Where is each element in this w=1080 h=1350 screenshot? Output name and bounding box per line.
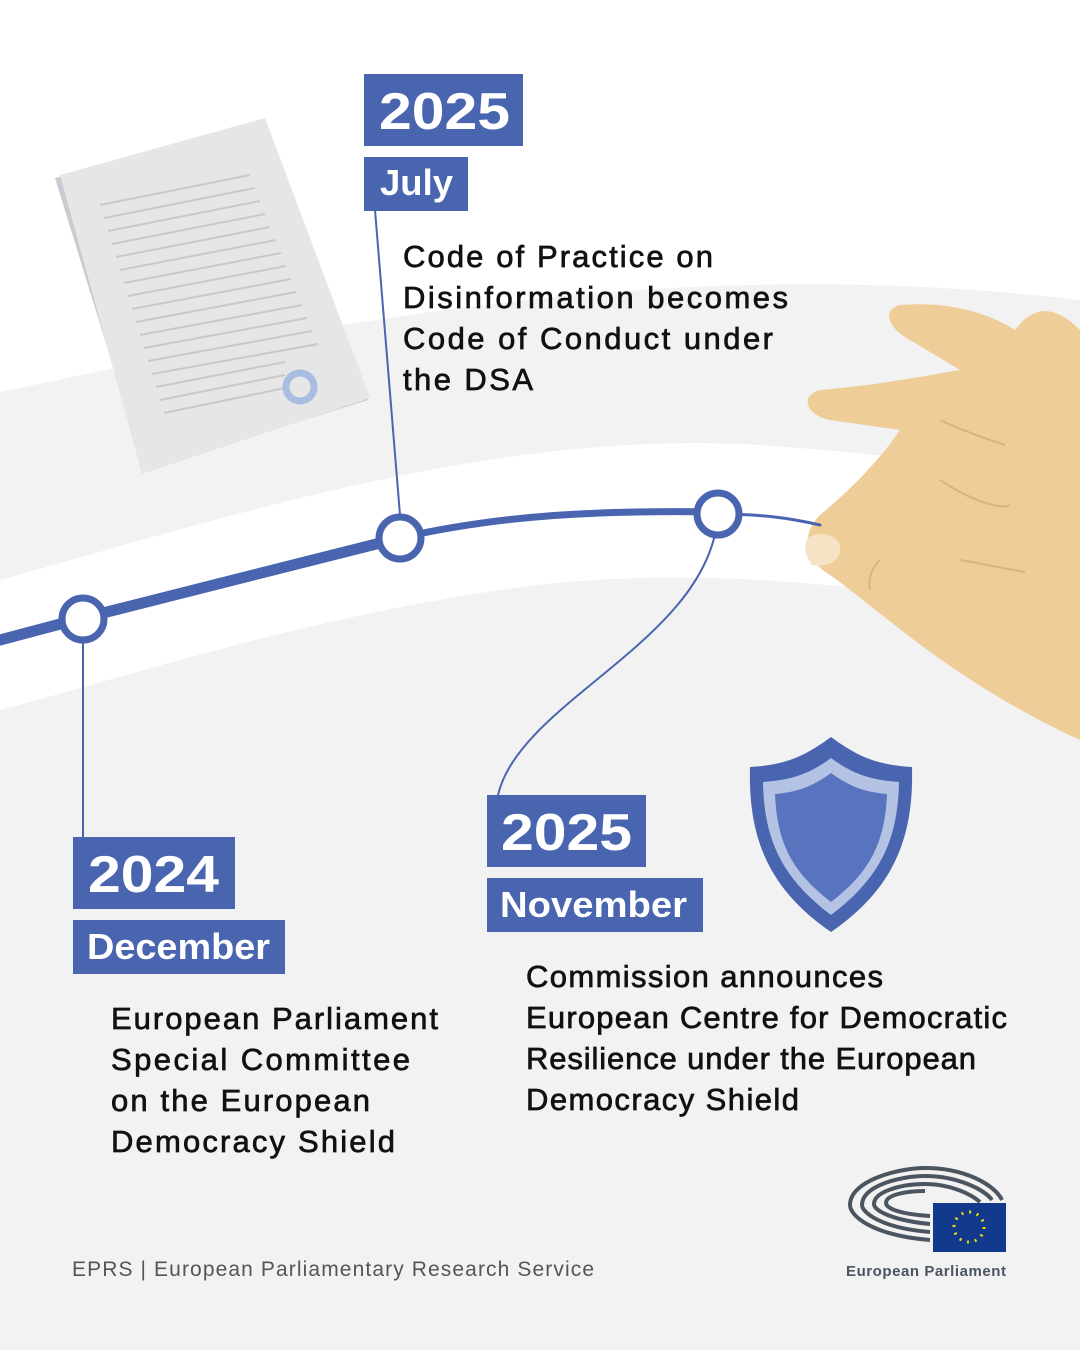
label: 2024 December: 2024 <box>88 846 219 904</box>
text: Commission announces <box>526 959 1007 1117</box>
text: European Parliament Special Committee: on the European <box>111 1083 370 1118</box>
icon: hand <box>805 304 1080 740</box>
label: 2025 July: July <box>380 162 453 203</box>
text: Code of Practice: Disinformation becomes <box>403 280 788 315</box>
text: Commission announces: Commission announces <box>526 959 883 994</box>
label: 2025 November: November <box>500 884 687 925</box>
text: Commission announces: European Centre for Democratic <box>526 1000 1007 1035</box>
text: Code of Practice: Code of Conduct under <box>403 321 773 356</box>
label: 2025 November <box>487 795 703 932</box>
label: 2024 December: December <box>87 926 270 967</box>
text: European Parliament Special Committee: European Parliament <box>111 1001 438 1036</box>
icon: document <box>55 118 370 474</box>
text: Code of Practice: the DSA <box>403 362 533 397</box>
text: Code of Practice: Code of Practice on <box>403 239 713 274</box>
icon: shield <box>750 737 912 932</box>
text: Commission announces: Democracy Shield <box>526 1082 799 1117</box>
label: 2025 July: 2025 <box>379 83 510 141</box>
timeline line <box>0 210 820 840</box>
label: 2025 November: 2025 <box>501 804 632 862</box>
label: 2024 December <box>73 837 285 974</box>
text: Code of Practice <box>403 239 788 397</box>
text: Commission announces: Resilience under the European <box>526 1041 976 1076</box>
footer: EPRS: EPRS | European Parliamentary Research Service <box>72 1258 594 1281</box>
logo: European Parliament <box>846 1168 1006 1280</box>
text: European Parliament Special Committee <box>111 1001 438 1159</box>
text: European Parliament Special Committee: Special Committee <box>111 1042 410 1077</box>
logo: European Parliament: European Parliament <box>846 1263 1006 1280</box>
label: 2025 July <box>364 74 523 211</box>
text: European Parliament Special Committee: Democracy Shield <box>111 1124 395 1159</box>
